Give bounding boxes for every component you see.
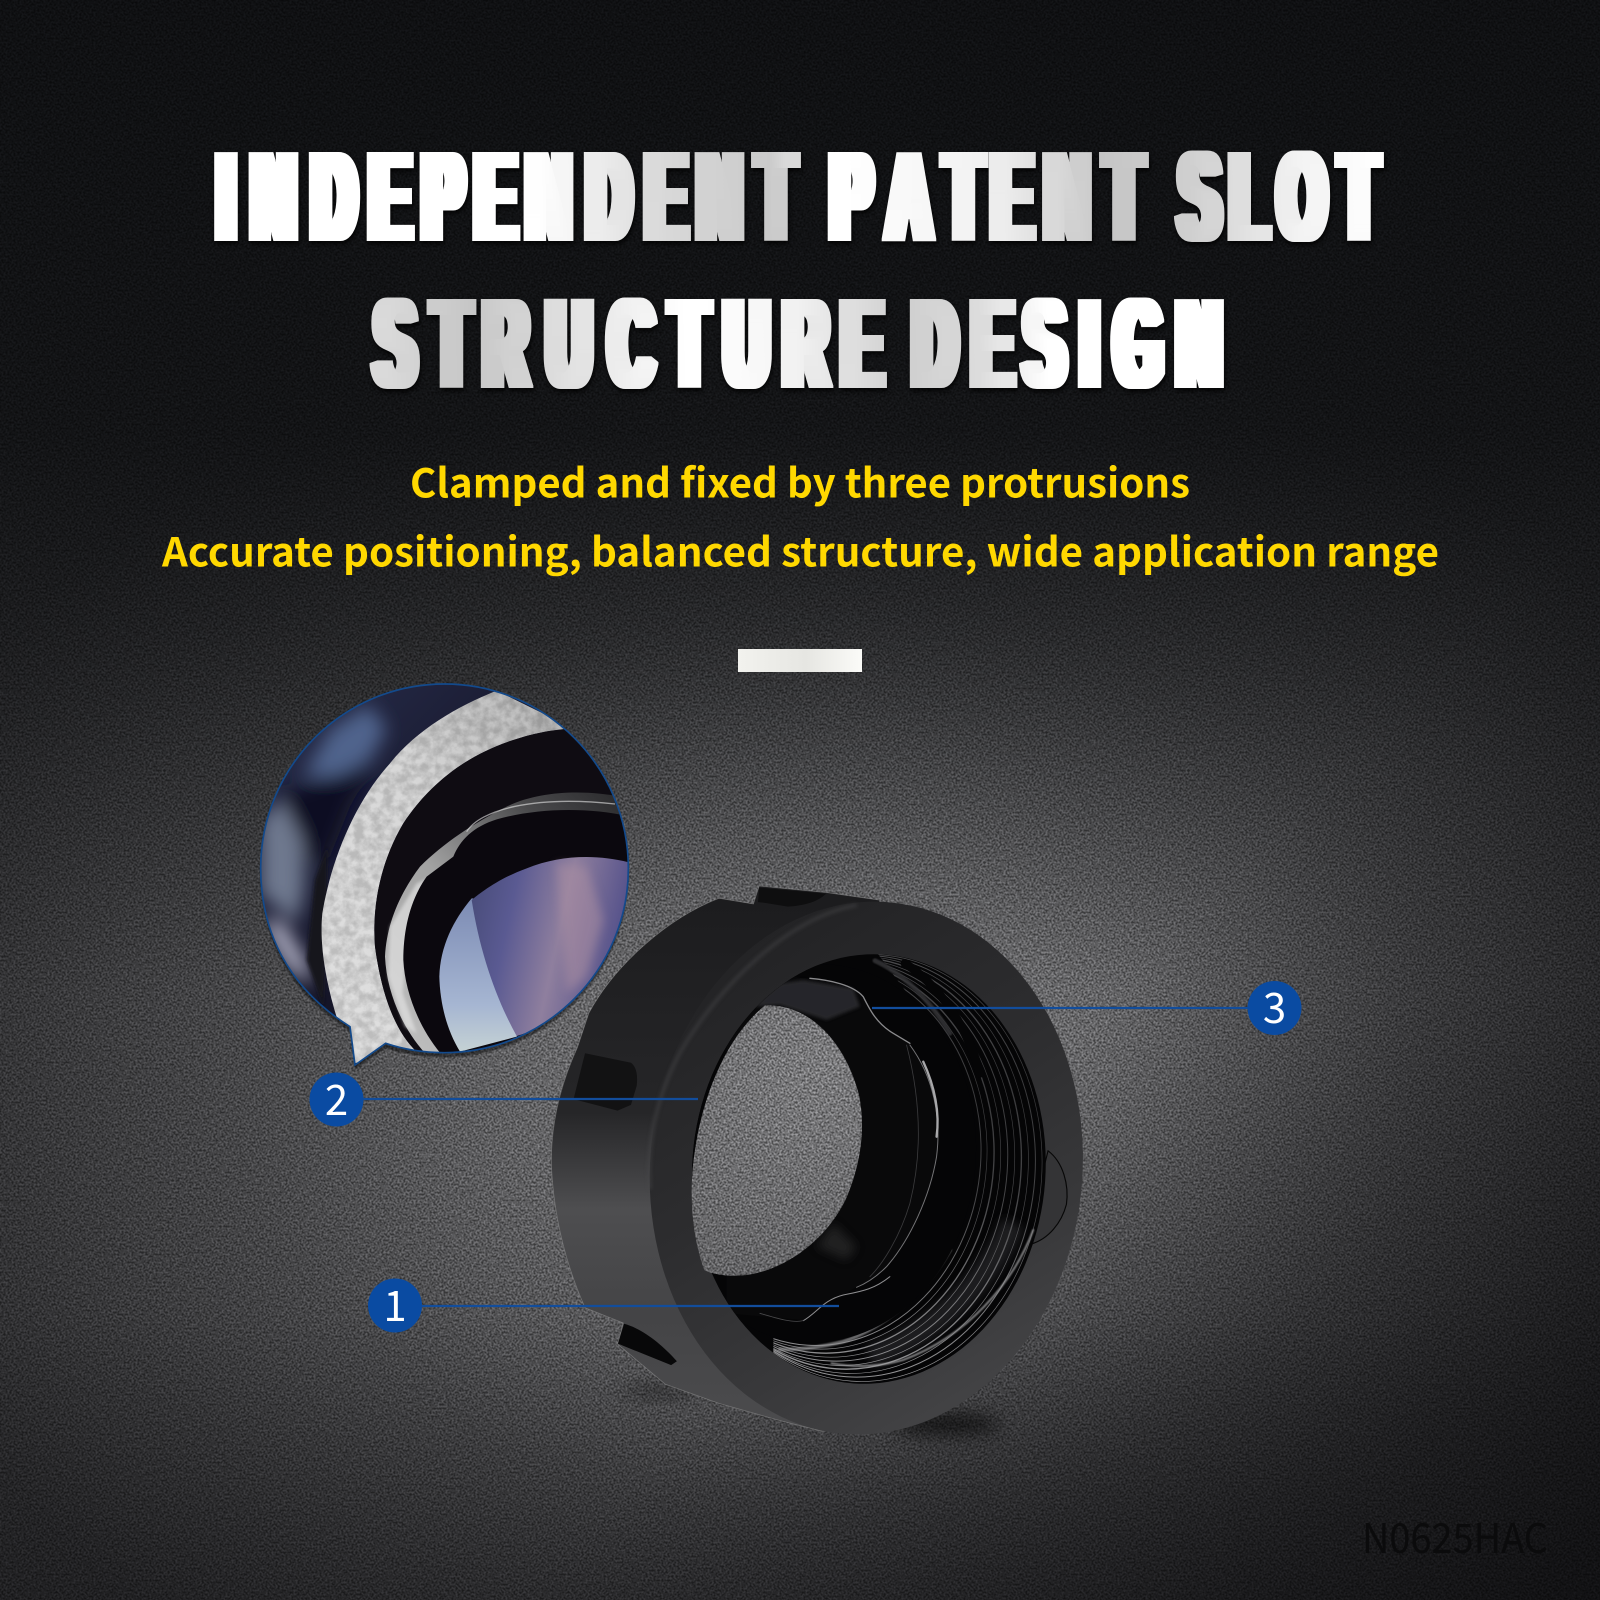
title line 2: STRUCTURE DESIGN — [375, 273, 1220, 414]
inner cone — [727, 963, 938, 1320]
nut body silhouette — [551, 886, 880, 1431]
thread rings — [646, 943, 1056, 1393]
purple reflection — [472, 857, 630, 1036]
nut ground shadow — [622, 1386, 1000, 1433]
silver inner chamfer — [385, 793, 640, 1057]
thread glow — [870, 1223, 1013, 1357]
marker 3: 3 — [1263, 975, 1286, 1036]
gloss bands — [780, 961, 1033, 1366]
marker 3 — [1248, 975, 1302, 1036]
leader lines — [340, 1008, 1260, 1306]
light blue lens sliver — [439, 898, 518, 1052]
product code: N0625HAC — [1362, 1505, 1548, 1565]
leader line 1 — [400, 1305, 839, 1307]
top notch — [758, 888, 826, 907]
cone sheen — [753, 980, 860, 1020]
zoomed ring detail — [253, 677, 640, 1073]
interior black — [660, 930, 1093, 1413]
marker 2: 2 — [325, 1067, 348, 1128]
upper slot — [574, 1053, 637, 1111]
marker 1: 1 — [383, 1273, 407, 1334]
callout outline — [261, 684, 628, 1065]
right slot on face — [1032, 1151, 1067, 1244]
white divider bar — [738, 649, 862, 672]
subtitle line 2: Accurate positioning, balanced structure, wide application range — [161, 520, 1439, 578]
marker 2 — [310, 1067, 364, 1128]
black groove — [374, 729, 612, 1050]
front face bevel highlight — [649, 905, 857, 1189]
inner dark band — [403, 810, 640, 1057]
leader line 2 — [340, 1098, 698, 1100]
white outer ring — [322, 691, 573, 1063]
magnifier callout — [253, 677, 640, 1073]
leader line 3 — [872, 1007, 1260, 1009]
callout shadow — [261, 689, 628, 1070]
title line 1: INDEPENDENT PATENT SLOT — [218, 126, 1377, 267]
inner shelf — [644, 953, 989, 1353]
marker 1 — [368, 1273, 422, 1334]
ring surface mottling — [322, 692, 560, 1063]
product: collet nut — [551, 883, 1105, 1453]
protrusion outlines — [760, 978, 938, 1321]
lower notch — [618, 1324, 677, 1365]
nut front face — [650, 902, 1083, 1434]
subtitle line 1: Clamped and fixed by three protrusions — [410, 452, 1190, 510]
subtitle — [161, 452, 1439, 578]
opening interior — [692, 954, 1046, 1384]
title — [218, 126, 1377, 414]
